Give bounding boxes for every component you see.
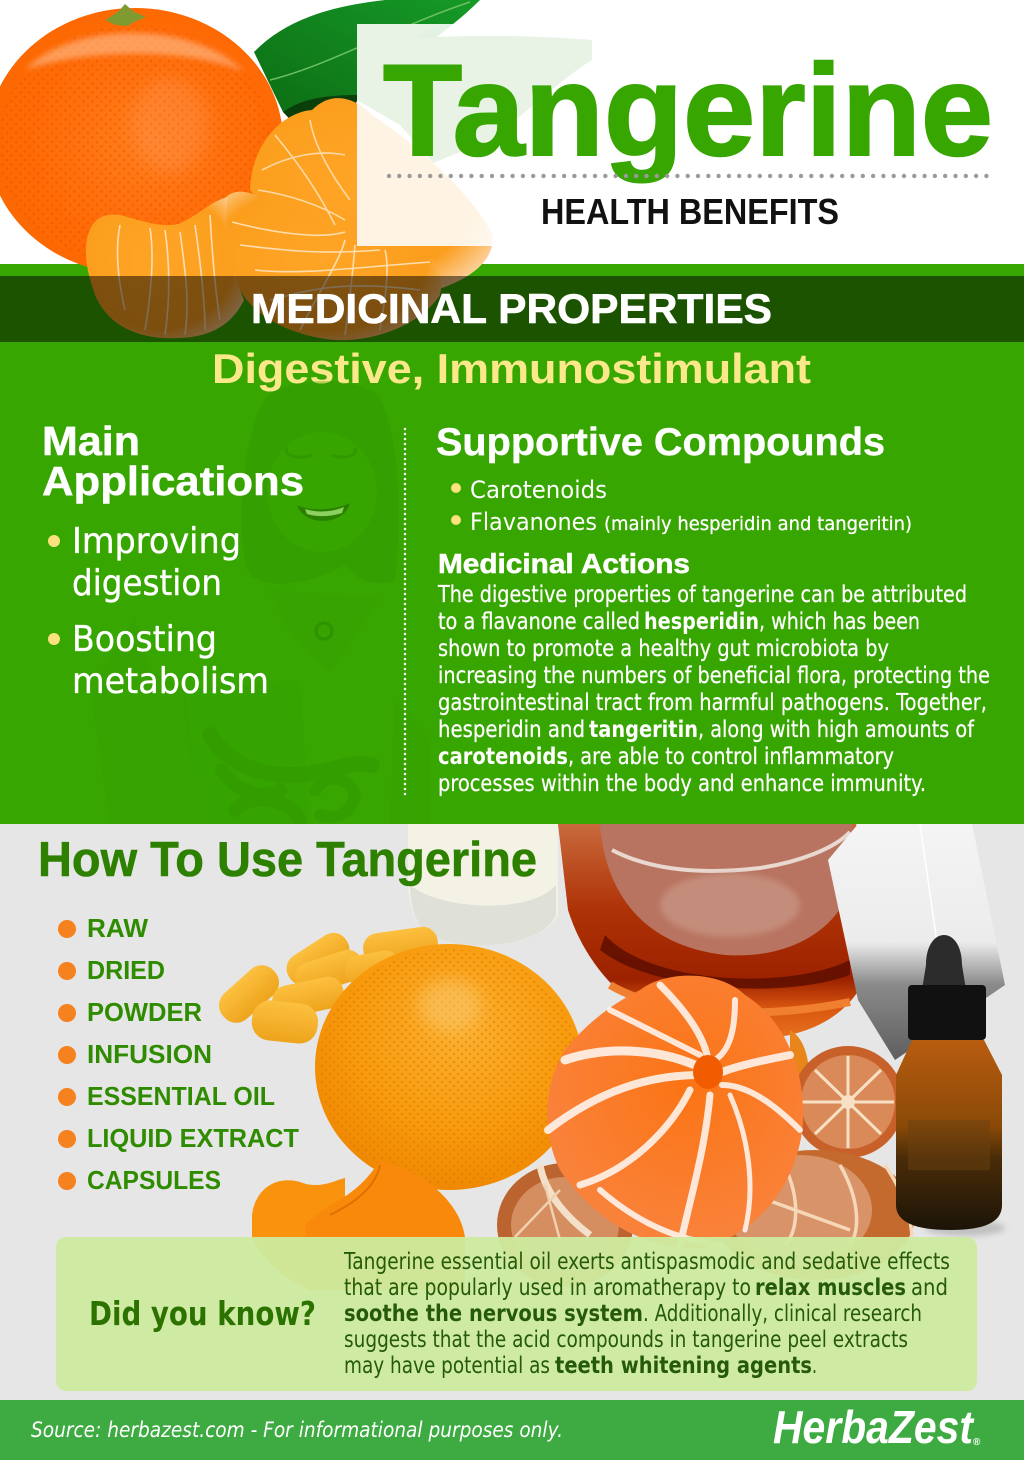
text block: medicinal actions paragraph: shown to promote a healthy gut microbiota by (438, 636, 889, 662)
text block: did you know paragraph: relax muscles (755, 1275, 906, 1301)
heading: how to use tangerine: How To Use Tangerine (38, 833, 537, 887)
bullet: carotenoids: Carotenoids (470, 476, 607, 504)
list: forms of use (58, 913, 299, 1195)
item: raw: RAW (87, 913, 148, 943)
item: infusion: INFUSION (87, 1039, 212, 1069)
bullet: flavanones (451, 508, 912, 536)
icon: whole orange (315, 944, 583, 1190)
icon: tangerine segment centre (222, 192, 441, 340)
bullet: boosting metabolism: Boosting (72, 619, 217, 660)
text block: did you know paragraph: and (911, 1275, 948, 1301)
text block: medicinal actions paragraph: hesperidin and (438, 717, 585, 743)
properties list: Digestive, Immunostimulant (212, 345, 811, 392)
did you know background (56, 1237, 977, 1391)
text block: medicinal actions paragraph (437, 582, 990, 797)
panel: main applications (42, 418, 304, 702)
item: powder: POWDER (87, 997, 202, 1027)
text block: medicinal actions paragraph: , along with high amounts of (698, 717, 975, 743)
dark title band: medicinal properties (0, 276, 1024, 342)
translucent title backing (357, 24, 1024, 246)
image: forms of tangerine (212, 824, 1005, 1290)
icon: dried orange slice lower left (497, 1163, 633, 1287)
icon: dropper bottle (896, 935, 1005, 1236)
icon: leaf (254, 0, 480, 130)
title: Tangerine (383, 37, 993, 183)
text block: did you know paragraph (343, 1249, 950, 1379)
bullet: flavanones: (mainly hesperidin and tangeritin) (604, 513, 912, 535)
text block: medicinal actions paragraph: hesperidin (644, 609, 759, 635)
logo: HerbaZest: HerbaZest (773, 1401, 974, 1453)
footer bar (0, 1400, 1024, 1460)
icon: tea bag (828, 824, 1005, 1060)
heading: medicinal properties: MEDICINAL PROPERTIES (251, 285, 772, 332)
icon: dried orange slice right (790, 1030, 904, 1158)
panel: did you know (56, 1237, 977, 1391)
bullet: flavanones: Flavanones (470, 508, 597, 536)
icon: glass of milky liquid (408, 824, 558, 945)
icon: tangerine segments lower left (252, 1160, 465, 1290)
icon: capsules (212, 925, 440, 1045)
main green panel background (0, 276, 1024, 824)
dotted divider (389, 174, 992, 178)
pale leaf brush shape (357, 24, 592, 163)
icon: tangerine segment left (86, 197, 244, 338)
background silhouette: woman holding intestine (92, 381, 430, 824)
text block: did you know paragraph: . Additionally, clinical research (643, 1301, 922, 1327)
source line: Source: herbazest.com - For informational purposes only. (31, 1418, 563, 1442)
bullet: improving digestion: digestion (72, 563, 222, 604)
icon: glass of tangerine tea (558, 824, 880, 1040)
text block: medicinal actions paragraph: tangeritin (589, 717, 698, 743)
white dotted column divider (404, 429, 406, 795)
heading: main applications: Main (42, 418, 140, 464)
text block: did you know paragraph: that are popularly used in aromatherapy to (344, 1275, 751, 1301)
text block: medicinal actions paragraph: carotenoids (438, 744, 568, 770)
icon: whole tangerine (0, 4, 283, 274)
text block: did you know paragraph: soothe the nervous system (344, 1301, 643, 1327)
green header stripe (0, 264, 1024, 276)
item: raw (58, 913, 148, 943)
text block: medicinal actions paragraph: processes within the body and enhance immunity. (438, 771, 926, 797)
subtitle: HEALTH BENEFITS (541, 191, 839, 232)
image: tangerine fruit with leaf (0, 0, 493, 340)
text block: medicinal actions paragraph: , which has been (759, 609, 920, 635)
registered mark: ® (973, 1437, 981, 1448)
text block: medicinal actions paragraph: , are able to control inflammatory (568, 744, 894, 770)
heading: medicinal actions: Medicinal Actions (438, 548, 690, 579)
text block: did you know paragraph: may have potential as (344, 1353, 550, 1379)
bullet: improving digestion: Improving (72, 521, 241, 562)
item: dried: DRIED (87, 955, 165, 985)
icon: peeled tangerine (547, 976, 803, 1248)
icon: dried orange slice lower right (715, 1150, 915, 1280)
panel: supportive compounds (436, 421, 990, 797)
heading: supportive compounds: Supportive Compounds (436, 421, 885, 464)
text block: medicinal actions paragraph: to a flavanone called (438, 609, 640, 635)
bullet: boosting metabolism (48, 619, 269, 702)
text block: did you know paragraph: teeth whitening agents (555, 1353, 812, 1379)
icon: tangerine segment back (250, 98, 493, 292)
heading: did you know: Did you know? (89, 1294, 316, 1333)
text block: did you know paragraph: . (812, 1353, 817, 1379)
bullet: boosting metabolism: metabolism (72, 661, 269, 702)
item: capsules: CAPSULES (87, 1165, 221, 1195)
bullet: improving digestion (48, 521, 241, 604)
heading: main applications: Applications (42, 458, 304, 504)
panel: how to use background (0, 824, 1024, 1400)
item: liquid extract: LIQUID EXTRACT (87, 1123, 299, 1153)
item: essential oil: ESSENTIAL OIL (87, 1081, 275, 1111)
